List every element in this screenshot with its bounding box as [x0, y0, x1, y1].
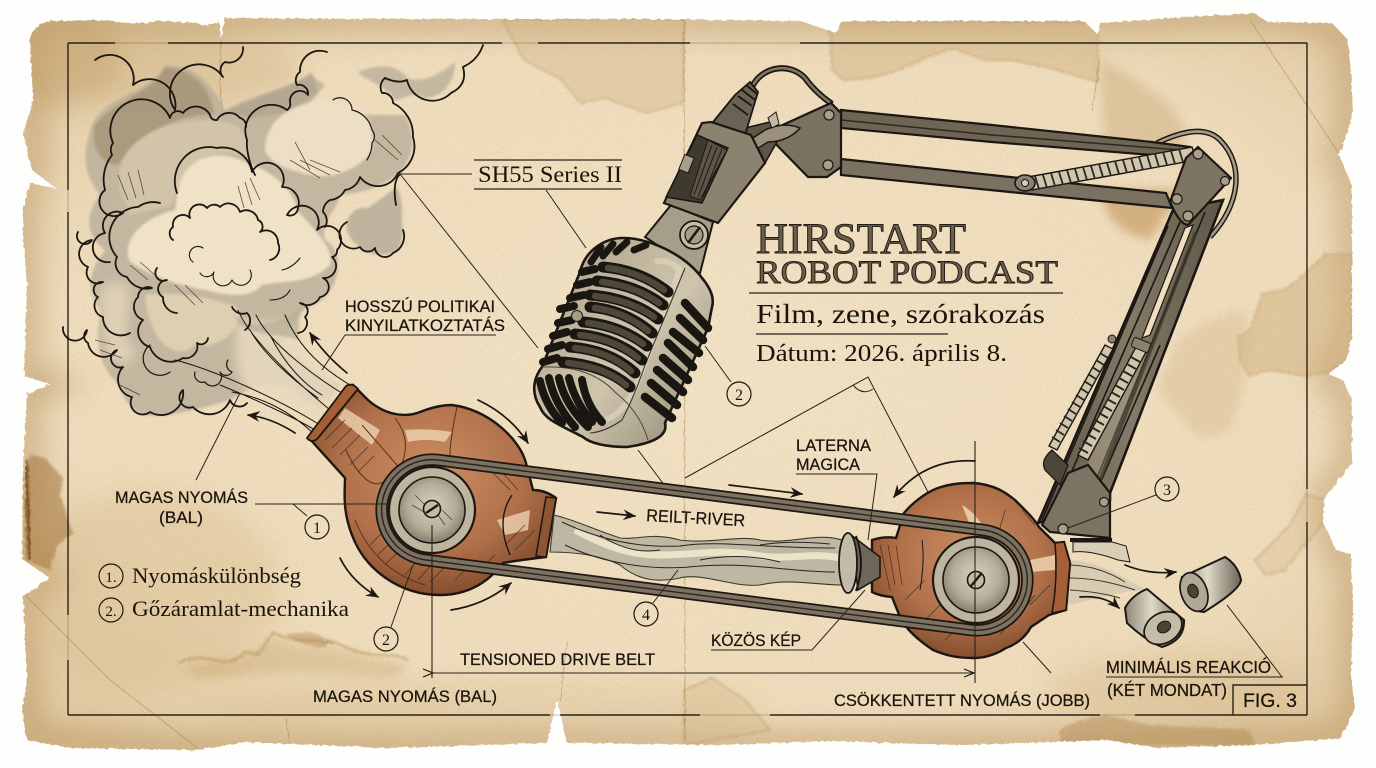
label: Reilt-River: REILT-RIVER — [646, 506, 746, 530]
figure tag — [1233, 685, 1307, 715]
dimension: tensioned drive belt — [432, 441, 975, 683]
date: Dátum: 2026. április 8. — [756, 341, 1007, 367]
top vent slots — [591, 242, 646, 262]
illustration: drive pulley left — [389, 467, 475, 553]
stain: coffee mark behind boom — [1100, 190, 1180, 240]
long spring right — [1078, 347, 1146, 460]
arrows: rotation around left vessel — [340, 400, 528, 610]
grey wash behind cloud — [86, 65, 412, 416]
front grille slots — [543, 267, 668, 387]
yoke arm — [645, 205, 713, 277]
elbow bracket — [1170, 147, 1231, 225]
XLR connector — [713, 82, 758, 135]
tilt knob — [750, 125, 800, 150]
arrow: arc to right vessel — [894, 461, 975, 497]
badge: 4: 4 — [642, 607, 650, 624]
illustration: drive belt — [382, 460, 1027, 630]
illustration: drive pulley right — [933, 537, 1019, 623]
angle construction lines — [638, 377, 941, 517]
diagram border frame — [68, 43, 1307, 715]
return cable loop — [1157, 131, 1236, 237]
heading: HIRSTART: HIRSTART — [756, 216, 966, 263]
label: Közös kép — [711, 590, 865, 650]
title block — [749, 216, 1063, 367]
base bracket — [1042, 465, 1110, 538]
badge: 3: 3 — [1163, 482, 1171, 499]
label: Reilt-River — [597, 506, 746, 530]
stain: right tide mark — [1238, 254, 1352, 376]
long spring left — [1049, 345, 1113, 450]
mount bracket triangle — [765, 103, 841, 177]
label: long political statement — [322, 297, 505, 370]
dimension: tensioned drive belt: TENSIONED DRIVE BELT — [460, 650, 655, 669]
stain: top centre — [502, 19, 684, 113]
cream puffs — [119, 120, 250, 215]
badge: 2 near microphone — [705, 346, 751, 406]
base collar — [1073, 542, 1130, 562]
legend: Gőzáramlat-mechanika — [132, 596, 349, 621]
subheading: Film, zene, szórakozás — [756, 298, 1045, 329]
lower boom bar — [841, 159, 1172, 208]
illustration: cylinder top — [1175, 557, 1241, 615]
microphone body — [534, 238, 713, 447]
label: reduced pressure right: CSÖKKENTETT NYOMÁS (JOBB) — [834, 691, 1090, 710]
illustration: microphone boom arm — [752, 68, 1236, 562]
illustration: microphone — [534, 82, 841, 447]
label: high pressure left: MAGAS NYOMÁS — [115, 488, 248, 507]
legend: Nyomáskülönbség — [132, 563, 301, 588]
badge: 1 — [293, 504, 329, 539]
illustration: right copper vessel — [839, 483, 1070, 658]
stain: lower left tide line — [178, 638, 408, 678]
label: Laterna Magica — [796, 436, 877, 540]
illustration: water stream — [550, 515, 842, 585]
label: minimal reaction — [1106, 605, 1283, 700]
mic cable — [752, 68, 832, 104]
badge: 2 under left vessel — [374, 565, 413, 651]
switch housing — [664, 122, 765, 223]
label: long political statement: KINYILATKOZTATÁS — [345, 316, 505, 335]
joint block — [745, 122, 778, 163]
side grille slots — [645, 303, 708, 418]
leader: SH55 to microphone — [546, 190, 586, 248]
leader: SH55 to diagonal — [400, 174, 538, 348]
arrow: steam upward — [310, 333, 347, 373]
label: minimal reaction: MINIMÁLIS REAKCIÓ — [1106, 656, 1271, 677]
illustration: steam cloud — [63, 45, 483, 432]
stain: right lower lobe — [1255, 495, 1330, 575]
illustration: left copper vessel — [307, 385, 556, 595]
cloud ink outlines — [95, 47, 243, 110]
small detached puff — [347, 187, 403, 255]
legend: 2. — [105, 604, 117, 620]
arrow: steam to the left — [248, 415, 295, 433]
highlights — [962, 505, 1055, 572]
arrows: outflow to cylinders — [1080, 565, 1176, 608]
label: Közös kép: KÖZÖS KÉP — [711, 631, 801, 650]
stain: left dark mark — [24, 455, 73, 570]
label: Laterna Magica: MAGICA — [796, 455, 861, 474]
illustration: cylinder bottom — [1125, 589, 1188, 651]
label: long political statement: HOSSZÚ POLITIKAI — [345, 297, 495, 316]
arrow: belt direction — [729, 485, 802, 494]
lens: Laterna Magica — [851, 535, 880, 590]
label: high pressure bottom: MAGAS NYOMÁS (BAL) — [313, 687, 497, 706]
label: SH55 Series II: SH55 Series II — [478, 162, 622, 187]
steam hatching — [95, 135, 402, 395]
neck flange — [307, 385, 358, 441]
stain: top right — [830, 22, 1098, 82]
upper boom bar — [841, 110, 1190, 157]
figure tag: FIG. 3 — [1243, 690, 1297, 712]
badge: 2 near microphone: 2 — [735, 387, 743, 404]
legend — [99, 563, 349, 622]
label: high pressure left — [115, 393, 388, 527]
badge: 1: 1 — [313, 520, 321, 537]
tension spring horizontal — [1028, 147, 1196, 190]
switch plate — [666, 135, 728, 203]
nozzle collar — [503, 495, 512, 555]
illustration: right side outflow — [1068, 560, 1145, 605]
label: minimal reaction: (KÉT MONDAT) — [1107, 680, 1227, 700]
stain: bottom right corner — [1060, 715, 1255, 745]
forearm bars — [1038, 200, 1223, 523]
heading: ROBOT PODCAST: ROBOT PODCAST — [756, 255, 1058, 291]
steam jet streaks — [175, 310, 350, 432]
label: reduced pressure right — [834, 642, 1090, 710]
legend: 1. — [105, 570, 117, 586]
badge: 4 — [634, 570, 678, 626]
label: Laterna Magica: LATERNA — [796, 436, 872, 455]
badge: 3 — [1068, 477, 1179, 528]
lower grille slots — [540, 378, 602, 427]
badge: 2 under left vessel: 2 — [382, 632, 390, 649]
highlights — [338, 408, 530, 535]
label: high pressure left: (BAL) — [159, 508, 203, 527]
stain: upper right wedge — [1100, 58, 1185, 165]
